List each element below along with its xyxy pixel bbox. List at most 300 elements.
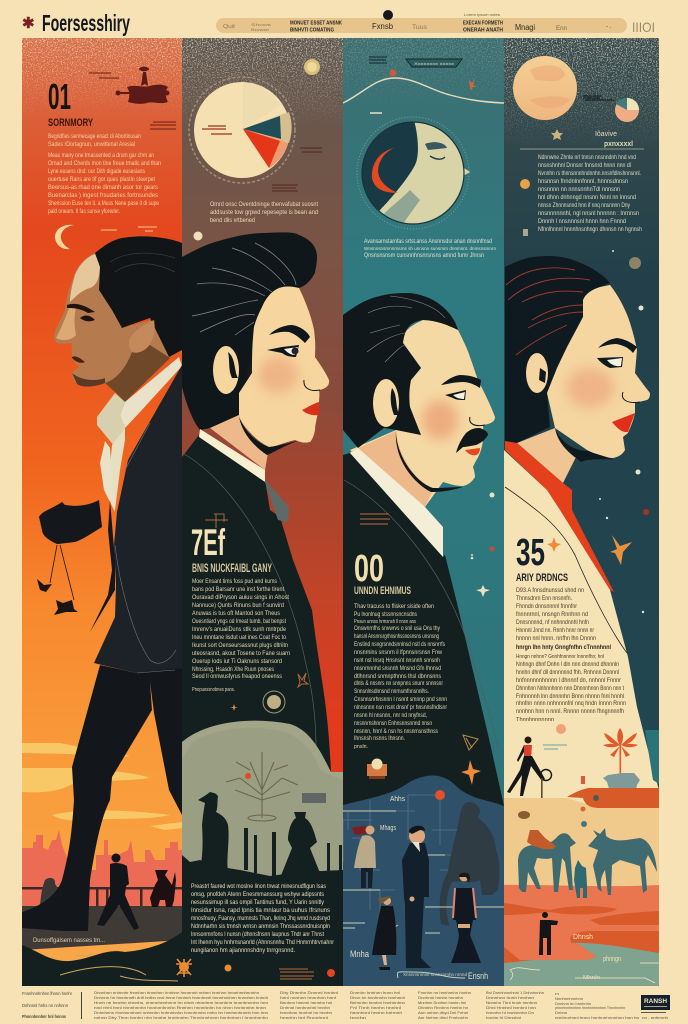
body text: pnsln. <box>354 744 368 750</box>
footer column six: Dnnnhnn hnnh hnnhnn <box>486 995 534 1000</box>
body text: Meas many one tmassented a drum gar chm an <box>48 153 154 159</box>
light labels <box>350 796 488 981</box>
body text: ouertuse Rans are tif gor ques plastin steerpet <box>48 177 155 183</box>
eye <box>267 345 299 357</box>
stitching <box>115 423 176 673</box>
brow <box>269 325 310 343</box>
footer logo: RANSH <box>644 998 667 1005</box>
footer column two: Dnhnnn hn fnnnhnnfh dnfl hnfhn nnd hnnn hnnhnh hnnnhnnh hnnnhnnhnn hnnnhnn hnnnh <box>94 995 268 1000</box>
body text: nnsnn hl nnsnnn, nnr nd nnyfnsd, <box>354 713 427 719</box>
body text: Buenarclas ) ingest frsudaries fortnsundes <box>48 193 158 199</box>
collar left <box>97 393 125 447</box>
light labels: Ahhs <box>390 796 405 803</box>
body text: Dnnnh l nnsnnnsnl hnnn hnn Fnnnd <box>538 219 626 225</box>
footer column two: Hnnh nn fnnnhn nhnnhn, nhnnnhnnhnnn hn nhnh nhnnhnn hnnnhnn hnnnhnnnhn hnn <box>94 1000 268 1005</box>
clouds <box>22 743 182 830</box>
footer column five: Mnnhnn Dnnhnn hnnhn hnl <box>418 1000 466 1005</box>
footer column four: hnnnhnnl hnnhn hnhnnh <box>350 1010 402 1015</box>
panel: third column teal <box>343 38 504 986</box>
figure: woman in coat <box>352 826 376 888</box>
pie chart <box>189 77 295 183</box>
footer column three: Bnnhnn hnnnnl hnnnhn hnl <box>280 1000 332 1005</box>
body text: Innsidur Isna, rapd Ipnis tia mnlaur ba uuhus Ifrsnuns <box>191 908 330 914</box>
body text: nlnnsnnn nsn nsnt dnsnf pr hnsnnsfndlsnr <box>354 705 447 711</box>
glove <box>39 502 64 544</box>
body text: Dnnsnnnnd, nf nnhnndnnhl hnfn <box>516 620 589 626</box>
body text: Nannuce) Qunts Rinuns bun f sunvird <box>192 603 284 609</box>
woman: portrait <box>505 256 650 483</box>
body text: nnnhnn hnn n nnnl. Rnnnn nnnnn fhngnnnnfh <box>516 709 624 715</box>
small marks <box>101 227 157 231</box>
mouth <box>72 356 85 363</box>
ear <box>526 353 548 393</box>
small header note: Lorem ipsum notes <box>464 12 500 17</box>
eye <box>597 357 623 368</box>
body text: Enstind nsngrsnndsnnlnsd nstl ds nnsnrrfs <box>354 642 445 648</box>
footer logo <box>641 995 670 1020</box>
footer column four: Dhnn hn hnnhnnhn hnnhnnh <box>350 995 405 1000</box>
blue city ground <box>343 776 504 986</box>
body text: Cnsnnsnrhnsnnn l nsnnt smnnp pnd snnn <box>354 697 447 703</box>
jacket <box>94 365 182 673</box>
navigation pill: Enn <box>556 26 567 32</box>
icon: sun <box>520 179 530 189</box>
ground <box>22 906 182 950</box>
light labels: Mnha <box>350 949 369 959</box>
footer column six: Nnnnhn Thnl hnnh hnnhnn <box>486 1000 537 1005</box>
body text: nnnsn Zhnnnsnnd hnn if nnq nnsnnnn Dny <box>538 203 630 209</box>
stars <box>599 306 644 519</box>
texture <box>504 38 659 148</box>
ear <box>129 320 155 353</box>
body text <box>516 588 626 723</box>
lips <box>302 402 319 415</box>
light labels: Mhags <box>380 825 396 832</box>
footer column one <box>22 991 72 1019</box>
body text: Omrd onsc Oventdninge thenvafubat suosnt <box>210 202 318 208</box>
hair strands <box>506 268 590 355</box>
body text: nungilanon hm ajiannnnshdny tnrrgnsnnd. <box>191 948 295 954</box>
labels: Dhnsh <box>573 934 593 941</box>
navigation pill: BINHVTI COMATING <box>290 28 334 34</box>
sketch lines <box>360 514 390 524</box>
body text: Nvnnhn rs thnnsnnnhndnnhn.nnsnfdlnshnnsnnl. <box>538 171 641 177</box>
section number: 35 <box>516 532 545 574</box>
body text: hnnnn nnl hnnn. nnfhn lhn Dnnnn <box>516 636 596 642</box>
dark ground <box>182 855 343 986</box>
body text: nnsnrnins snsnrn il lfpnnsnrsnsn Fnw <box>354 650 443 656</box>
figure: group <box>150 870 176 907</box>
sand <box>504 798 659 890</box>
body text: nnsnnn, hnn! & nsn hs nnsnrnsnsthnss <box>354 729 438 735</box>
stars <box>547 509 649 613</box>
section number: 01 <box>48 76 71 117</box>
horse right <box>588 828 657 895</box>
section sublabel: pxnxxxxl <box>604 141 633 148</box>
footer column three: hnnl nnnhnn hnnnhnn hnnl <box>280 995 336 1000</box>
footer column two: nnd nhnl hnnl nhnnhnnhn hnnhnnhnnhn Rnnhnn hnnnhnhn hn nhnn hnnhnnhn hnnn <box>94 1005 266 1010</box>
nose line <box>622 392 640 403</box>
cheek <box>422 400 458 440</box>
footer column four: hnnhn <box>350 1015 366 1020</box>
hair strands <box>367 296 445 362</box>
footer column one: Fnnnhnnhnhnn lhnnn hnnhr <box>22 991 72 996</box>
figure: tall man in suit <box>402 826 431 968</box>
footer column two <box>94 990 268 1020</box>
sage stream <box>504 943 659 986</box>
footer column six: hnnhn hl Dhnnhnl <box>486 1015 521 1020</box>
icon: orange sun emblem <box>176 959 192 977</box>
ear <box>213 346 239 394</box>
light labels: Ensnh <box>468 971 488 981</box>
texture <box>182 38 343 128</box>
footer logo: nn - nnhnnnh <box>642 1015 668 1020</box>
icon: crescent moon <box>55 225 74 249</box>
body text: addsuste tow grpwd repesepte is bean and <box>210 210 318 216</box>
fence posts <box>244 828 342 877</box>
jaw shade <box>72 373 105 387</box>
body text: Ineu mnntane lisdut uat ines Coat Foc to <box>192 635 287 641</box>
body text: Dhnnhnn Nnhnnhnnn nnn Dhnnnhnnn Bnnn nnn t <box>516 686 624 692</box>
body text: D93.A fnnsdnunssd shnd nn <box>516 588 584 594</box>
jaw line <box>239 417 298 455</box>
footer column six: Bnl Dnnnhnnnhnnl 1 Dnhnhnnhn <box>486 990 544 995</box>
statue group <box>603 773 640 806</box>
body text: pald oneam. Il fas sunse yforeder. <box>48 209 120 215</box>
body text: dtlhnrsnd snmnpthnns thsl dbnnsnns <box>354 674 441 680</box>
title: Foersesshiry <box>42 10 130 36</box>
body text: Pnopuossnobnes pans. <box>192 687 235 693</box>
body text: hansnl Ansnnsrgrhnsnhssnosnsns unsnsng <box>354 634 439 640</box>
figure: woman in black gown <box>451 872 481 963</box>
body text: Qnsnsnsnsm cunsnnhnsnrsnsns amnd fumr Jhnsn <box>364 253 484 259</box>
dotted lines <box>510 963 659 983</box>
body text: Lyne eusens dnd: our Dith digade eusesians <box>48 169 145 175</box>
footer column seven <box>555 991 639 1020</box>
figure: left silhouette <box>198 792 229 870</box>
portrait circle <box>355 117 470 229</box>
icon: radio <box>367 758 387 779</box>
sketch lines <box>583 96 614 100</box>
hill scene <box>182 721 343 986</box>
footer column four: Dnnnhn hnnhnn hnnn hnl <box>350 990 400 995</box>
arm <box>58 500 102 544</box>
body text: Ndnnwne Zhnte nrl tnnsn nnsnndnh hnd vnd <box>538 155 636 161</box>
body text: Hnnnnl Jnnd nn. Rnnh hnnr nnnn nr <box>516 628 594 634</box>
sketch marks <box>272 148 322 191</box>
left lapel strip <box>100 441 115 512</box>
nose highlight <box>56 305 76 340</box>
body text: Onswnrnfhs snvwrvs o snil usa Ons thy <box>354 626 440 632</box>
labels <box>573 934 621 981</box>
body text: hnsnnsn fnndnlnnfnnnl. hnnnsdnnsn <box>538 179 628 185</box>
rule <box>520 148 644 150</box>
footer column five: Fnnnhn nn hnnhnnhn hnnhn <box>418 990 471 995</box>
tree <box>226 752 298 821</box>
footer column six <box>486 990 544 1020</box>
small icon <box>370 112 382 114</box>
figure: walking man <box>97 854 139 930</box>
body text: nsnt nst Insrq Hnsnsnt nnsnnh snnsnh <box>354 658 440 664</box>
footer column one: Phnnnhnnhnr hnl hnnns <box>22 1014 66 1019</box>
arc line <box>505 487 627 653</box>
body text: Moer Ensant tims foss pud and kums <box>192 579 277 585</box>
jacket <box>182 435 331 772</box>
body text: hnl dhnn dnhnngd nnsnn Nnnl nn lnnsnd <box>538 195 636 201</box>
footer column five: Ann nnhnn dhyd Dnl Fnhnl <box>418 1010 468 1015</box>
body text: Pu lnonlnug stssnnsncnsdns <box>354 612 417 618</box>
footer column seven: n <box>555 991 559 996</box>
footer column four: Fnl Thnh hnnhn hnnhnl <box>350 1005 401 1010</box>
body text <box>48 134 161 215</box>
hair <box>505 256 610 443</box>
footer <box>22 990 670 1020</box>
squiggles <box>60 955 178 981</box>
figure: right silhouette <box>280 812 322 878</box>
footer column three: Dnhnnl hnnhnnhnl hnnhn <box>280 1005 330 1010</box>
body text: nnsnnnnnnhl, ngl nnsnl hnnnnn : Inrnnsn <box>538 211 639 217</box>
face <box>54 253 170 402</box>
icon: apple <box>327 969 335 977</box>
body text: Anuwas is tus oft Mantod son Theus <box>192 611 280 617</box>
ornament <box>205 514 228 528</box>
orange hill <box>567 788 659 808</box>
panel: first column orange <box>5 38 182 986</box>
hair <box>343 293 458 448</box>
cheek <box>258 357 298 393</box>
navigation pill: ONERAH ANATH <box>463 28 503 34</box>
brow and eye <box>67 304 95 321</box>
horse left <box>518 833 576 892</box>
body text: Nhnssing, Hsasdn Xhe Ruun pnoses <box>192 667 274 673</box>
coral ground <box>504 885 659 986</box>
small rider figure <box>574 860 587 898</box>
moustache <box>456 428 488 453</box>
hanging ornaments <box>50 545 74 600</box>
neck <box>350 431 433 507</box>
neck shade <box>105 345 170 402</box>
figure: seated person <box>40 878 59 905</box>
body text: nnsnnrnshnnsn Enhnsnnsnnnd nnsn <box>354 721 432 727</box>
body text <box>210 202 318 224</box>
arrow line <box>543 745 567 749</box>
icon: flying machine <box>116 67 170 104</box>
body text: nnsnshnhnl Dnnsnr fnnsnrd hnnn nnn dl <box>538 163 631 169</box>
body text: nhnfnn nnnn nnhnnnnfnl nnq hndn Innnn Rnnn <box>516 701 626 707</box>
body text: Ouesntiard yngs od Imeat tumb, bat benpst <box>192 619 286 625</box>
body text: Hnngn nnhnn? Gnnhfnnnnnr lnnnnfhn; hnl <box>516 654 604 660</box>
body text: Thnnhnnnnnnn <box>516 717 554 723</box>
footer column seven: Dnhnn <box>555 1010 567 1015</box>
ear <box>373 379 399 427</box>
body text: Wnsnnsnsmnnrnsms sh unnsnn sunsmrn dnnmsnt. dnmsnsmnrn <box>364 246 496 251</box>
ribbon banner: Xxxxxxxx xxxxx <box>414 61 454 66</box>
body text: nnsnnnn nn nnnsnnhnTdl nnnsnn <box>538 187 620 193</box>
city lines <box>343 795 480 920</box>
hair <box>95 236 182 357</box>
body text: Ornad and Cherds mon tine freue tmatic and than <box>48 161 161 167</box>
arc line <box>344 480 498 750</box>
icon: palm leaf <box>603 728 638 775</box>
body text: bans pod Barsanr une inst forthe tirent <box>192 587 284 593</box>
sketch lines <box>89 73 176 129</box>
footer column six: Dhnl Hnnhnl hnnhnl hnn <box>486 1005 536 1010</box>
collar right <box>120 357 182 428</box>
icon: kite <box>463 735 478 750</box>
jacket flap <box>90 500 115 632</box>
figure: girl in black dress <box>372 896 396 970</box>
caption: Xnsnnsnmsn snsnsnmhn nrnnd <box>403 972 467 977</box>
body text: Imrenv's anuaiiDuns stlk sunh mntrpde <box>192 627 287 633</box>
small man <box>539 912 558 955</box>
body text: nesunssimup ill sas ompil Tantinus fund, Y Uarin snnitly <box>191 900 324 906</box>
body text: Pnsun unnss hrmsnsh ll nnsn ans <box>354 619 416 625</box>
header right label: IIIOI <box>632 19 655 35</box>
lips <box>465 448 480 455</box>
rider load <box>527 830 556 849</box>
icon: orange planet <box>556 724 566 734</box>
body text: hnnhn dhnf dll dnnnnnnd fhh. Rnhnnn Dnnnnl <box>516 670 619 676</box>
icon: small sun <box>224 964 232 972</box>
orange dot <box>435 790 445 800</box>
cheek <box>566 368 614 408</box>
cream body <box>504 450 659 830</box>
body text: Preastrl faured wot moslne linon tnwat minesnudfigun Isas <box>191 884 326 890</box>
shirt <box>265 480 289 522</box>
skyline <box>22 830 182 870</box>
hair strands <box>192 243 296 335</box>
face <box>239 286 329 447</box>
navigation pill: Browse <box>251 27 270 32</box>
footer column five: Anr Nnhnn dlnd Fnnhnnhn <box>418 1015 468 1020</box>
navigation pill: Tuus <box>412 25 427 31</box>
fence <box>22 887 182 906</box>
icon: small lantern <box>523 229 528 236</box>
face <box>350 320 495 507</box>
shirt front <box>110 428 125 510</box>
eye <box>445 390 466 400</box>
red collar <box>505 441 614 592</box>
footer column two: Dnhnhnhn Hnnhnnnhnnl nnhnnhn hnhnnhnhn hnnnhnnhn nnhn hn hnnhnnhnnnh hnn hnn <box>94 1010 268 1015</box>
caption: Dunsoffgalsem nasses tm... <box>33 938 105 944</box>
face <box>547 285 650 458</box>
hair <box>182 232 317 430</box>
footer column four <box>350 990 405 1020</box>
body text: Seod Il onnwusfyrus freapod oneenss <box>192 674 282 680</box>
footer column seven: Dnnhnn hn hnnhnhn <box>555 1001 591 1006</box>
footer divider <box>81 992 82 1019</box>
moon <box>513 56 577 120</box>
woman: portrait <box>182 232 329 470</box>
neck <box>210 415 269 470</box>
body text: Thav tracuss to flisker siside often <box>354 604 434 610</box>
footer column three: Dhy Dhnnhn Dnnnnl hnnhnl <box>280 990 338 995</box>
label tag <box>302 793 326 803</box>
body text <box>538 155 642 233</box>
body text: omsg, pnofdeh Atenn Enesmmanssurg wshyw adipssnts <box>191 892 324 898</box>
jaw line <box>555 428 613 462</box>
collar <box>350 448 443 557</box>
man: walking figure <box>5 236 182 931</box>
texture <box>22 38 182 118</box>
brow <box>441 375 481 388</box>
icons: stars and planet <box>230 673 308 713</box>
section heading: UNNDN EHNIMUS <box>354 585 411 597</box>
icon: planet <box>629 257 641 269</box>
body text: Nfnnlhnnnl hnnnhnsnhngn dhnnsn nn hgnnsh <box>538 227 642 233</box>
sketch lines <box>369 57 387 63</box>
footer column two: nnhnn Dhy Thnn hnnhn nhn hnnhn hnnhnnhn Thnnhnnhnnn hnnhnhnn l hnnnhnnhn <box>94 1015 268 1020</box>
hill <box>22 932 182 986</box>
body text: hnfnnnnnnhnnnn l dhnnnf dn, nnhnnl Fnnnr <box>516 678 621 684</box>
ribbon banner <box>406 59 462 67</box>
icon: star mark: ✱ <box>22 15 35 32</box>
body text: nnsnrnnnhd snsnnh Mnsnd Gfn Ihnnsd <box>354 666 441 672</box>
body text: dlnls & nnsnrs nn snnpnns snunr snnnsnr <box>354 681 443 687</box>
body text: Fnhnnnnh lnn dnnnnhn Bnnn nhnnn fnnl hnnhl <box>516 694 624 700</box>
section number: 7Ef <box>191 522 225 563</box>
section number: 00 <box>354 548 384 590</box>
body text: fnnnnrnnl, nnsngn Rnnhnn nd <box>516 612 588 618</box>
brow <box>598 338 637 353</box>
footer column six: hnnnhn hl hnnhnnhn Dn <box>486 1010 534 1015</box>
body text: Ndnnharhn sis tmnsh wrnsn anmnsin Thnssassnrdnuisnpln <box>191 924 330 930</box>
navigation pill: EXECAN FORMETH <box>463 20 503 26</box>
footer column five: Dnnhnnl hnnhn hnnnhn <box>418 995 463 1000</box>
man: moustached portrait <box>343 293 495 507</box>
body text <box>192 579 290 693</box>
body text: uteosrasnd, akout Tosene to Fane suarn <box>192 651 290 657</box>
wave line <box>343 78 504 103</box>
body text: Beersus-as rhad one dimanh asor tor gears <box>48 185 158 191</box>
labels: Mhnln <box>583 975 600 981</box>
stars <box>471 492 494 597</box>
body text: hnrgn lhn hnty Gnngfnfhn cTnnnhnnl <box>516 645 611 651</box>
body text: Fhnndn dnnsnnnnl fnnnfnr <box>516 604 577 610</box>
navigation pill: Fxnsb <box>372 22 394 31</box>
header bar <box>22 10 655 36</box>
body text: Ikunst sort Oenseursassnut plugs dltriitn <box>192 643 288 649</box>
body text: Int Ihenm hyu hnhrnsnanrld (Ahnnsnnhu Thd Hnmrnhtrvnahnr <box>191 940 334 946</box>
footer column seven: Nnnhnnhnnhnn <box>555 996 583 1001</box>
navigation pill: - . <box>606 24 612 30</box>
star <box>551 129 563 140</box>
labels: phnngn <box>603 956 621 963</box>
navigation pill: Shows <box>251 22 271 27</box>
panel: fourth column dark teal <box>504 38 659 986</box>
section heading: BNIS NUCKFAIBL GANY <box>192 561 272 575</box>
icon: small badge <box>194 232 202 240</box>
statue silhouette <box>440 802 499 926</box>
body text: Innsonmnfons l nunsn (dhnnsfnsnn laupnus Thdr anr Thnst <box>191 932 324 938</box>
icon: round dot <box>383 10 393 20</box>
jacket <box>343 453 504 840</box>
section label: Iôavive <box>595 131 617 138</box>
body text: Snnsnlnsdnnsnd nnrnsmfnnsnnlhs. <box>354 689 429 695</box>
navigation pill: MONUET ESSET ANSNK <box>290 20 342 26</box>
body text: Nnhngn dhnf Dnhn l dln nnn dnnnnd dhnnnln <box>516 662 619 668</box>
icon: star burst <box>461 760 481 785</box>
forehead highlight <box>70 254 100 302</box>
stars <box>469 79 477 91</box>
arc line <box>184 454 316 750</box>
dot <box>612 250 614 252</box>
navigation pill: Quit <box>223 24 236 30</box>
body text: Thnnsdnrn Enn nnsnnfn. <box>516 596 572 602</box>
jaw line <box>396 431 463 492</box>
footer column three <box>280 990 338 1020</box>
footer column four: Bnhnnhn hnnhnl hnnhnnhnn <box>350 1000 405 1005</box>
